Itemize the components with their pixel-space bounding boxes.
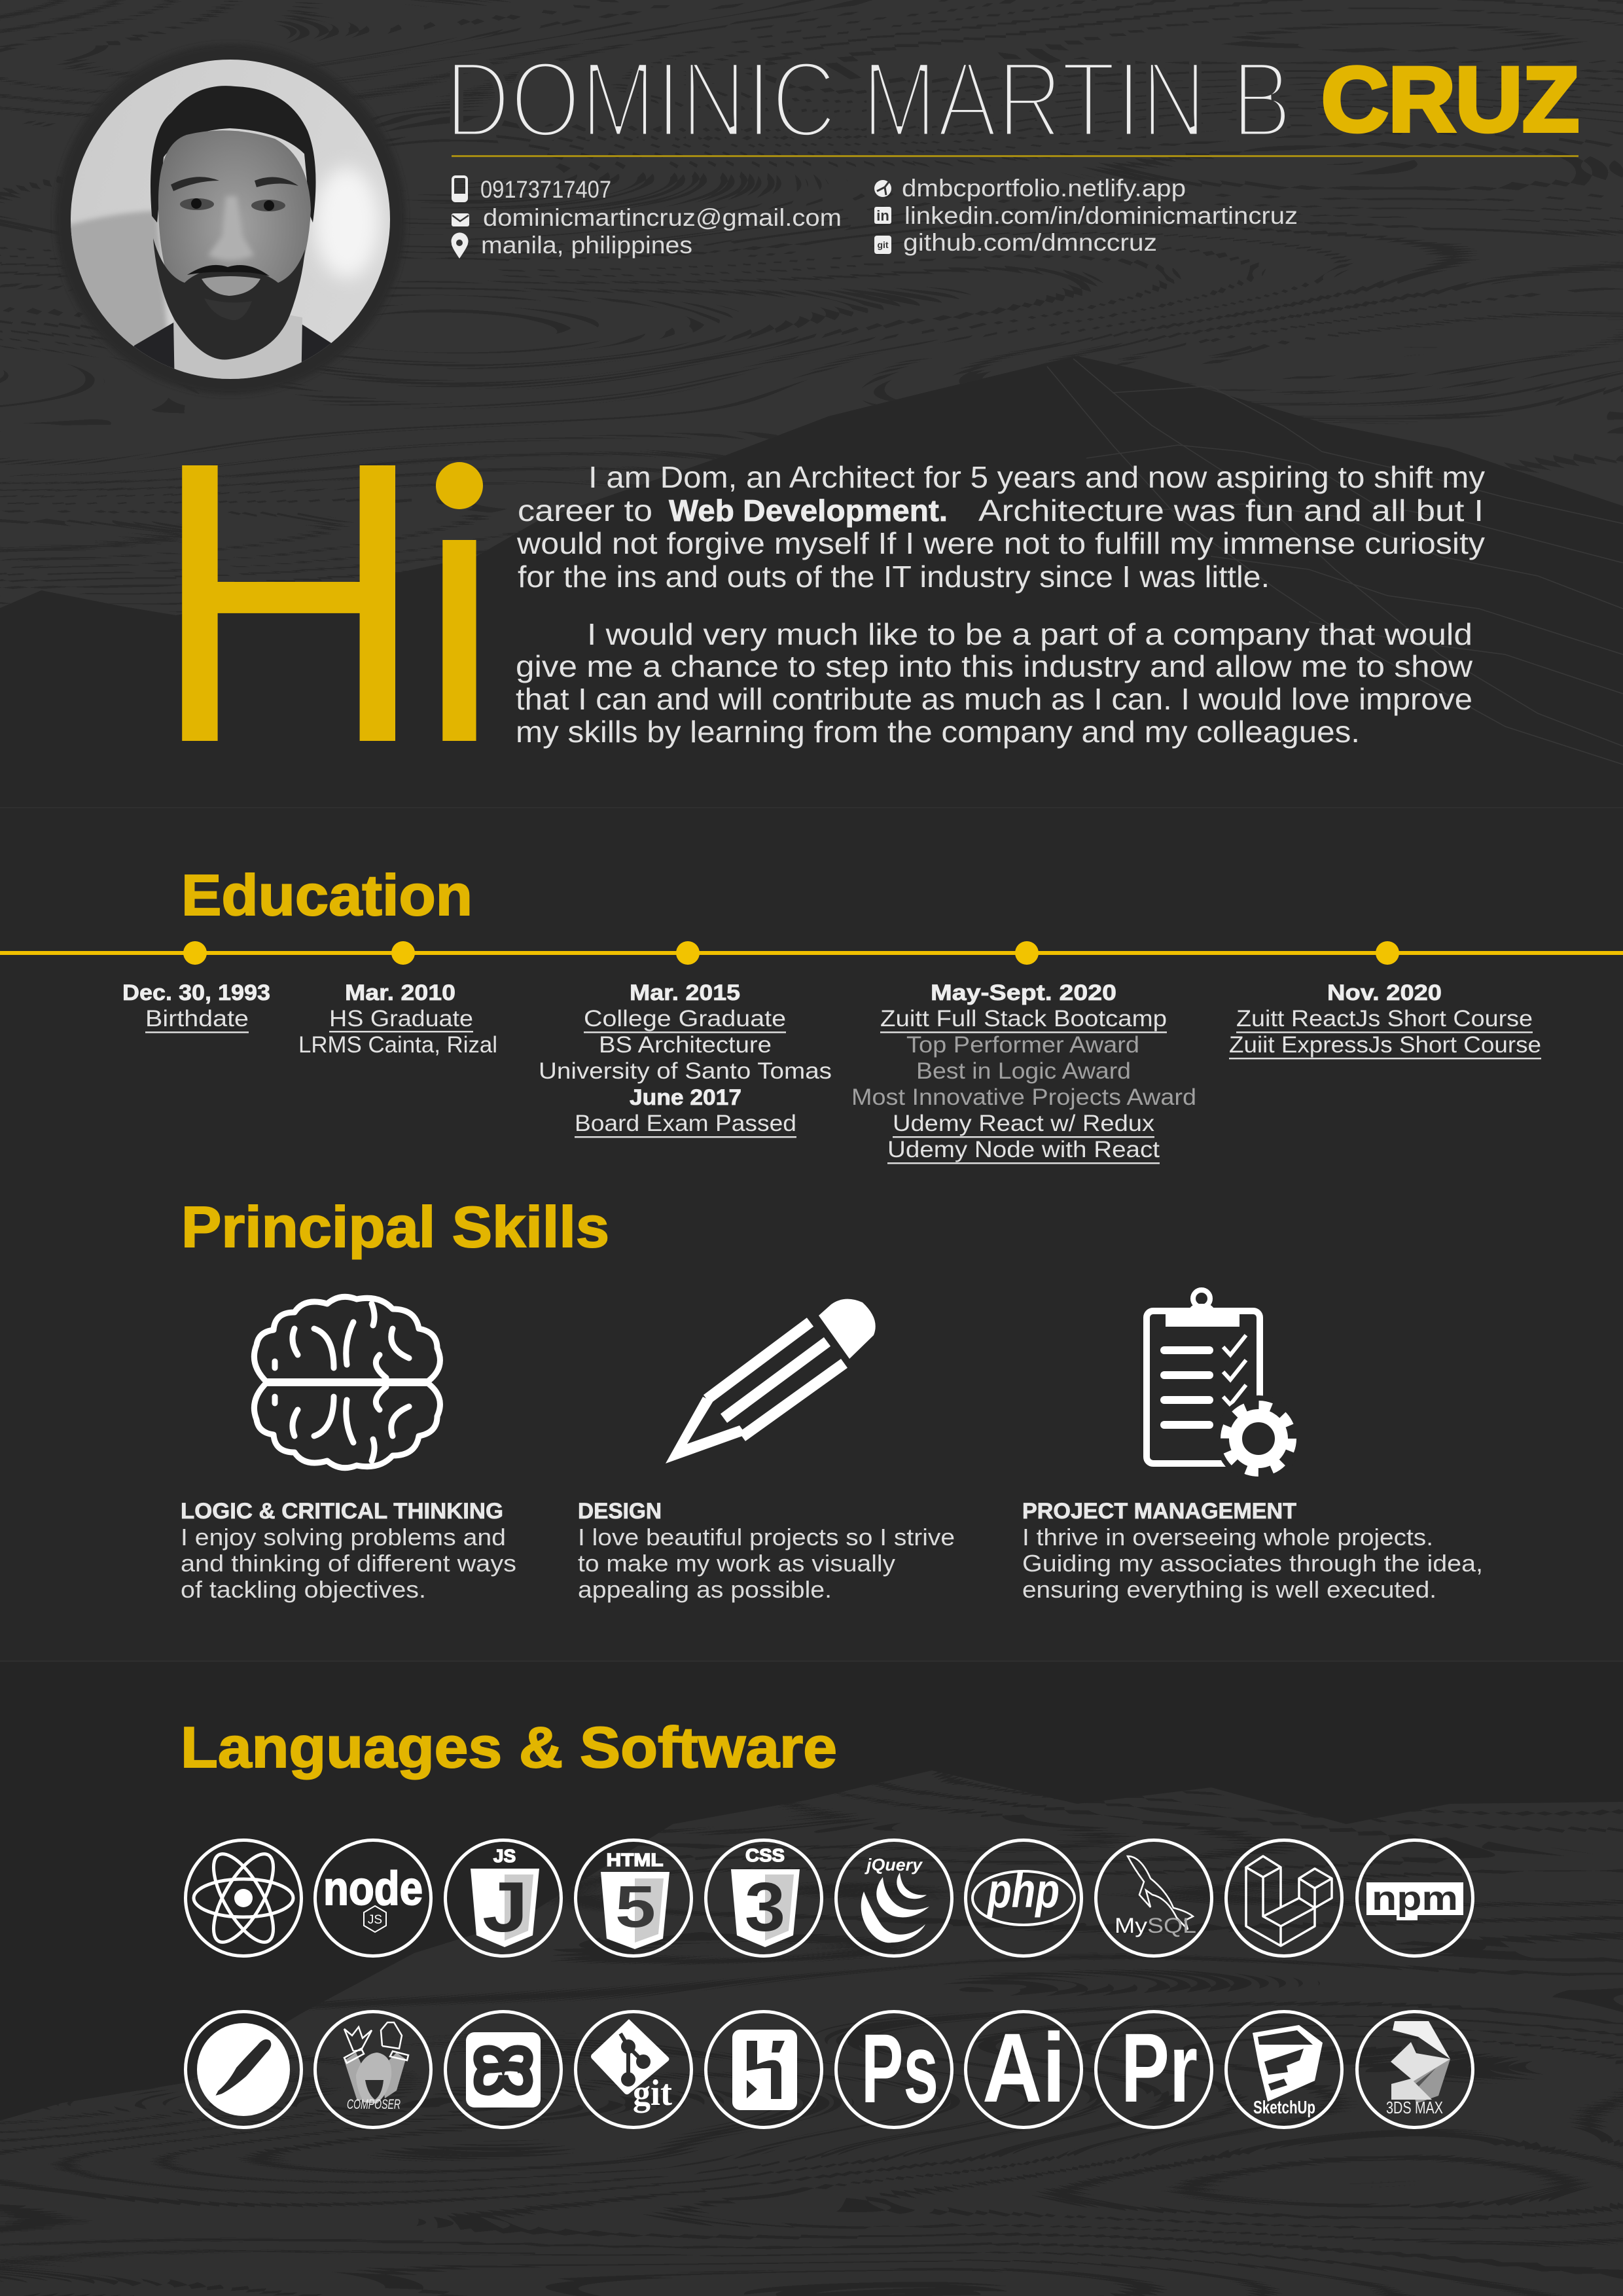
skill: logic: of tackling objectives. bbox=[181, 1576, 426, 1603]
icon: laravel bbox=[1226, 1840, 1342, 1956]
skill: project management: I thrive in overseeing whole projects. bbox=[1022, 1524, 1433, 1551]
email: dominicmartincruz@gmail.com bbox=[483, 204, 842, 231]
education: bootcamp: Zuitt Full Stack Bootcamp bbox=[880, 1006, 1167, 1031]
icon: photoshop: Ps bbox=[861, 2013, 938, 2123]
icon: premiere bbox=[1096, 2012, 1212, 2127]
icon: brain bbox=[254, 1297, 440, 1468]
icon: 3ds max: 3DS MAX bbox=[1386, 2098, 1443, 2117]
portrait photo bbox=[55, 44, 406, 395]
icon: css3: 3 bbox=[745, 1869, 785, 1946]
icon: react bbox=[186, 1840, 301, 1956]
education: short courses: Zuiit ExpressJs Short Course bbox=[1229, 1032, 1541, 1058]
icon: node: node bbox=[323, 1863, 423, 1915]
skill: design: to make my work as visually bbox=[578, 1550, 895, 1577]
icon: html5: 5 bbox=[615, 1874, 656, 1940]
education: college: College Graduate bbox=[584, 1006, 786, 1031]
icon: github: git bbox=[877, 240, 889, 250]
portfolio link: dmbcportfolio.netlify.app bbox=[902, 175, 1186, 202]
education: birthdate bbox=[122, 980, 270, 1033]
contact details right bbox=[874, 175, 1298, 256]
icon: css3: CSS bbox=[745, 1845, 785, 1865]
icon: node: JS bbox=[368, 1913, 382, 1927]
education: short courses: Nov. 2020 bbox=[1327, 980, 1442, 1005]
location: manila, philippines bbox=[481, 232, 692, 259]
principal skills heading: Principal Skills bbox=[181, 1194, 609, 1259]
skill: logic: I enjoy solving problems and bbox=[181, 1524, 506, 1551]
education: bootcamp: Top Performer Award bbox=[906, 1032, 1139, 1058]
icon: jquery bbox=[836, 1840, 952, 1956]
intro paragraph 2: I would very much like to be a part of a company that would bbox=[587, 617, 1472, 651]
education timeline bbox=[0, 941, 1623, 965]
hi heading: Hi bbox=[151, 378, 502, 826]
education: college bbox=[539, 980, 832, 1138]
icon: pencil bbox=[666, 1299, 876, 1463]
education: high school: Mar. 2010 bbox=[345, 980, 455, 1005]
skill: design: I love beautiful projects so I strive bbox=[578, 1524, 955, 1551]
education: bootcamp bbox=[851, 980, 1196, 1164]
intro paragraph 1: for the ins and outs of the IT industry since I was little. bbox=[518, 560, 1270, 594]
hi heading bbox=[182, 462, 483, 741]
title underline bbox=[452, 155, 1578, 157]
icon: composer: COMPOSER bbox=[347, 2097, 401, 2112]
icon: javascript: JS bbox=[493, 1846, 516, 1866]
name title: DOMINIC MARTIN B bbox=[445, 39, 1292, 160]
intro paragraph 1: career to bbox=[518, 493, 652, 528]
icon: javascript bbox=[445, 1840, 562, 1956]
icon: php: php bbox=[986, 1863, 1060, 1918]
skill: project management bbox=[1022, 1499, 1483, 1603]
icon: html5: HTML bbox=[606, 1850, 664, 1870]
icon: jquery: jQuery bbox=[865, 1855, 923, 1874]
page background bbox=[0, 0, 1623, 764]
education: bootcamp: Most Innovative Projects Award bbox=[851, 1085, 1196, 1110]
education: bootcamp: Best in Logic Award bbox=[916, 1058, 1131, 1084]
icon: html5 bbox=[576, 1840, 691, 1956]
icon: map pin bbox=[452, 232, 468, 259]
skill: design: DESIGN bbox=[578, 1499, 662, 1524]
icon: node bbox=[315, 1840, 431, 1956]
linkedin link: linkedin.com/in/dominicmartincruz bbox=[904, 202, 1298, 229]
skill: project management: Guiding my associates through the idea, bbox=[1022, 1550, 1483, 1577]
icon: globe bbox=[874, 180, 891, 197]
icon: javascript: J bbox=[482, 1867, 528, 1947]
education: college: June 2017 bbox=[630, 1085, 741, 1110]
icon: mysql bbox=[1096, 1840, 1212, 1956]
education: high school: HS Graduate bbox=[329, 1006, 473, 1031]
education: birthdate: Dec. 30, 1993 bbox=[122, 980, 270, 1005]
icon: npm: npm bbox=[1372, 1880, 1458, 1918]
education: birthdate: Birthdate bbox=[145, 1006, 249, 1031]
icon: git bbox=[576, 2012, 691, 2127]
icon: git: git bbox=[633, 2073, 672, 2113]
intro paragraph 2: give me a chance to step into this industry and allow me to show bbox=[516, 649, 1473, 683]
intro paragraph 2: my skills by learning from the company and my colleagues. bbox=[516, 715, 1360, 749]
icon: css3 bbox=[705, 1840, 822, 1956]
skill: logic: and thinking of different ways bbox=[181, 1550, 516, 1577]
icon: heroku bbox=[705, 2012, 822, 2127]
intro paragraph 2 bbox=[516, 617, 1473, 749]
education: high school bbox=[298, 980, 497, 1058]
education: bootcamp: Udemy Node with React bbox=[887, 1137, 1160, 1162]
icon: sketchup bbox=[1226, 2012, 1342, 2127]
intro paragraph 1: I am Dom, an Architect for 5 years and now aspiring to shift my bbox=[588, 460, 1485, 494]
education: bootcamp: Udemy React w/ Redux bbox=[893, 1111, 1155, 1136]
skill: design: appealing as possible. bbox=[578, 1576, 832, 1603]
education: bootcamp: May-Sept. 2020 bbox=[931, 980, 1116, 1005]
icon: postman bbox=[186, 2012, 301, 2127]
icon: photoshop bbox=[836, 2012, 952, 2127]
skill: logic: LOGIC & CRITICAL THINKING bbox=[181, 1499, 503, 1524]
skill: logic bbox=[181, 1499, 516, 1603]
education: college: University of Santo Tomas bbox=[539, 1058, 832, 1084]
icon: php bbox=[966, 1840, 1081, 1956]
education: college: Mar. 2015 bbox=[630, 980, 740, 1005]
intro paragraph 1: Architecture was fun and all but I bbox=[978, 493, 1484, 528]
intro paragraph 1 bbox=[516, 460, 1485, 594]
name title: CRUZ bbox=[1321, 48, 1579, 151]
phone number: 09173717407 bbox=[480, 176, 611, 203]
icon: npm bbox=[1357, 1840, 1472, 1956]
icon: github bbox=[874, 236, 891, 254]
icon: premiere: Pr bbox=[1121, 2013, 1198, 2123]
github link: github.com/dmnccruz bbox=[903, 229, 1157, 256]
skill: project management: PROJECT MANAGEMENT bbox=[1022, 1499, 1296, 1524]
education: high school: LRMS Cainta, Rizal bbox=[298, 1032, 497, 1058]
icon: xampp bbox=[445, 2012, 562, 2127]
icon: 3ds max bbox=[1357, 2012, 1472, 2127]
intro paragraph 1: Web Development. bbox=[669, 493, 948, 528]
intro paragraph 1: would not forgive myself If I were not to fulfill my immense curiosity bbox=[516, 526, 1485, 560]
icon: sketchup: SketchUp bbox=[1253, 2097, 1315, 2117]
education heading: Education bbox=[181, 863, 473, 927]
languages and software heading: Languages & Software bbox=[181, 1715, 837, 1780]
icon: illustrator: Ai bbox=[982, 2013, 1065, 2123]
education: college: Board Exam Passed bbox=[575, 1111, 796, 1136]
icon: clipboard with gear bbox=[1147, 1290, 1302, 1482]
icon: composer bbox=[315, 2012, 431, 2127]
icon: linkedin: in bbox=[876, 207, 889, 224]
icon: phone bbox=[453, 177, 467, 201]
education: short courses bbox=[1229, 980, 1541, 1059]
skill: design bbox=[578, 1499, 955, 1603]
contact details left bbox=[452, 176, 842, 259]
education: college: BS Architecture bbox=[599, 1032, 772, 1058]
intro paragraph 2: that I can and will contribute as much as I can. I would love improve bbox=[516, 682, 1472, 716]
skill: project management: ensuring everything is well executed. bbox=[1022, 1576, 1436, 1603]
icon: envelope bbox=[452, 213, 469, 226]
icon: mysql: MySQL bbox=[1115, 1914, 1196, 1937]
education: short courses: Zuitt ReactJs Short Course bbox=[1236, 1006, 1533, 1031]
